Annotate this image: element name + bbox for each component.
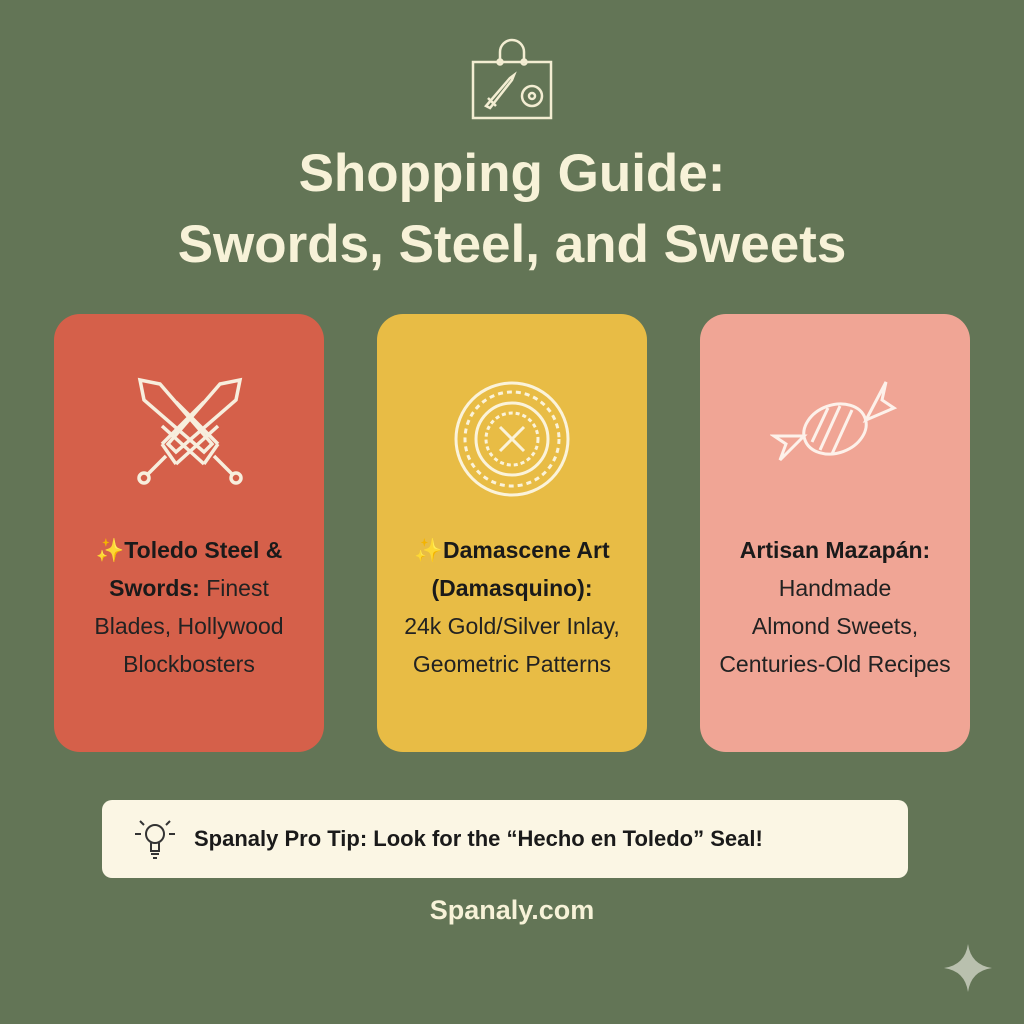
title — [178, 144, 846, 274]
text: Centuries-Old Recipes — [719, 651, 951, 677]
icon: damascene medallion — [454, 382, 570, 496]
text: Blades, Hollywood — [94, 613, 284, 639]
footer: Spanaly.com — [430, 895, 594, 925]
text: Blockbosters — [123, 651, 255, 677]
icon: shopping bag — [472, 38, 552, 120]
text: (Damasquino): — [432, 575, 592, 601]
text: Almond Sweets, — [752, 613, 918, 639]
callout: pro tip: Spanaly Pro Tip: Look for the “Hecho en Toledo” Seal! — [194, 826, 763, 851]
text — [404, 537, 620, 677]
text — [719, 537, 951, 677]
title: Shopping Guide: — [299, 144, 725, 203]
text — [94, 537, 284, 677]
icon: candy — [770, 381, 897, 461]
panel: Mazapan — [700, 314, 970, 752]
icon: sparkle — [944, 944, 992, 992]
text: ✨Toledo Steel & — [96, 537, 282, 563]
icon: lightbulb — [135, 820, 175, 859]
text: Geometric Patterns — [413, 651, 611, 677]
panel: Toledo steel — [54, 314, 324, 752]
text: Handmade — [779, 575, 891, 601]
callout: pro tip — [102, 800, 908, 878]
title: Swords, Steel, and Sweets — [178, 215, 846, 274]
text: 24k Gold/Silver Inlay, — [404, 613, 620, 639]
text: Swords: Finest — [109, 575, 269, 601]
icon: crossed swords — [137, 378, 243, 485]
text: Artisan Mazapán: — [740, 537, 930, 563]
text: ✨Damascene Art — [414, 537, 610, 563]
panel: Damascene art — [377, 314, 647, 752]
